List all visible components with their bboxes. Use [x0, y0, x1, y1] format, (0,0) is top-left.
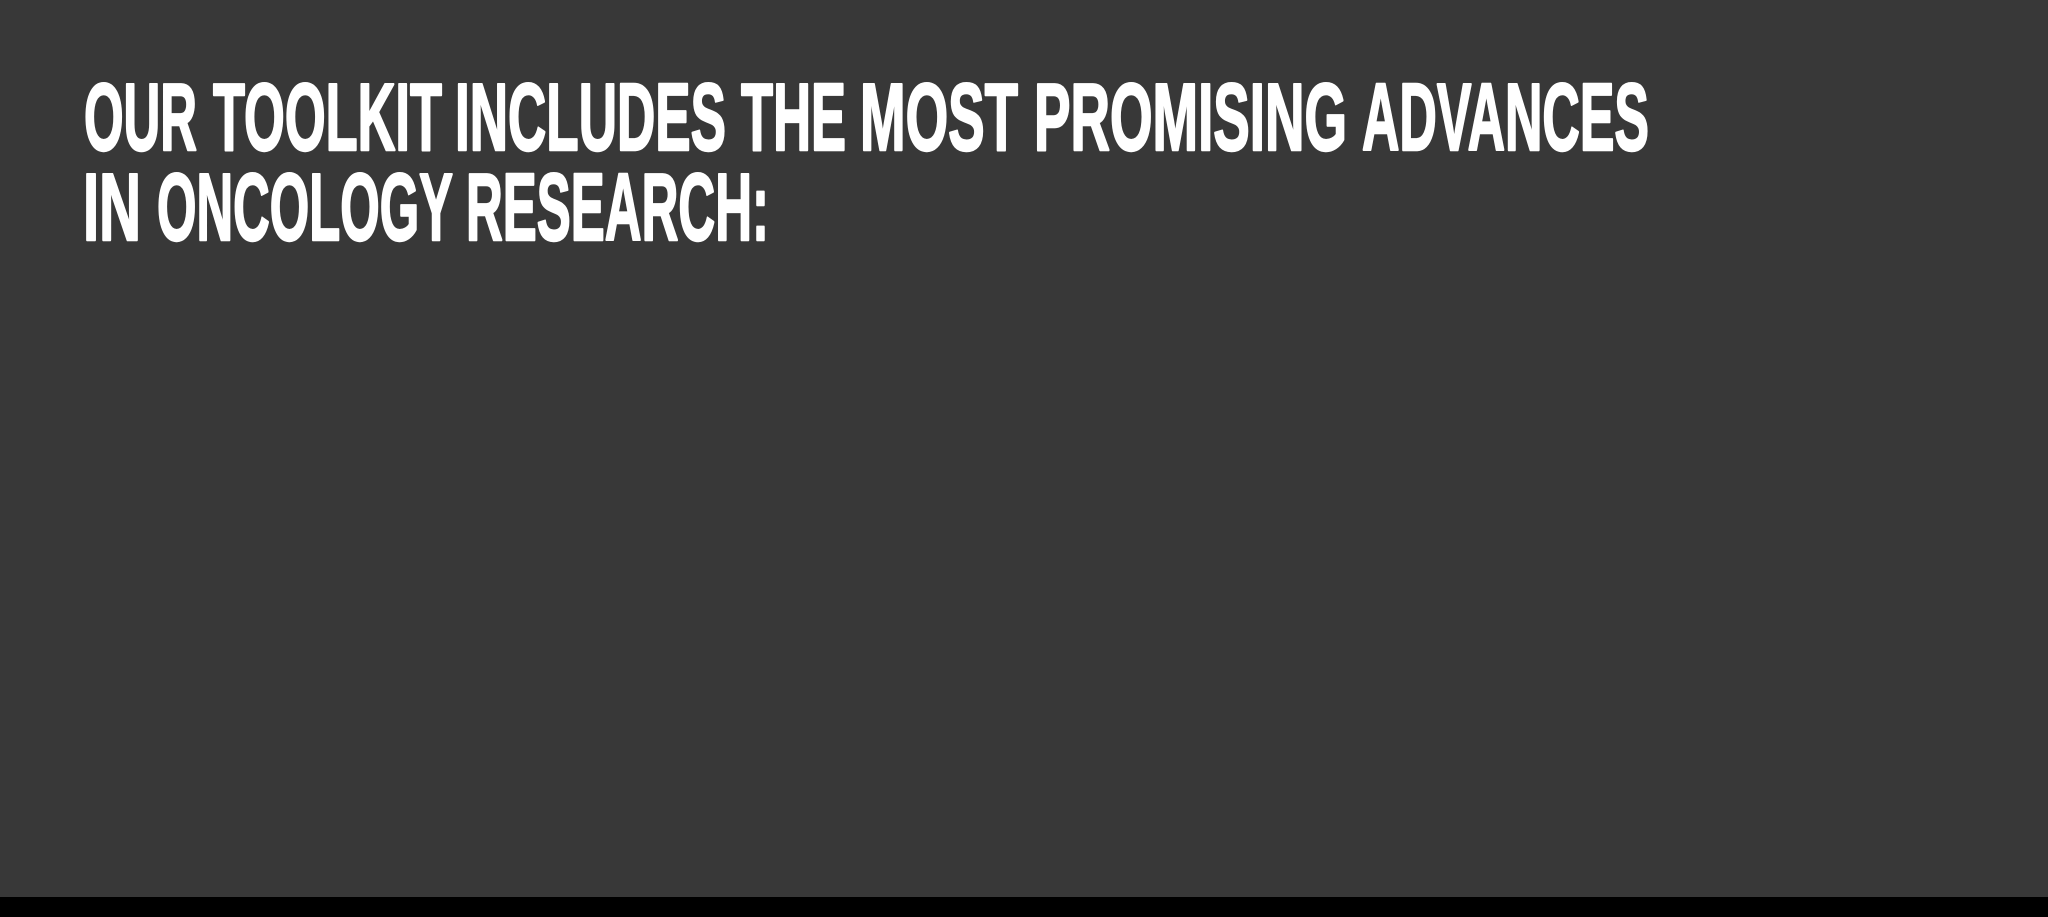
title: MOST [860, 64, 1018, 171]
title: THE [741, 64, 846, 171]
title [83, 64, 1649, 261]
bottom black bar [0, 897, 2048, 917]
title: PROMISING [1034, 64, 1347, 171]
title: RESEARCH: [466, 154, 769, 261]
title: TOOLKIT [213, 64, 442, 171]
title: OUR [84, 64, 197, 171]
title: IN [83, 154, 141, 261]
title: ADVANCES [1362, 64, 1649, 171]
title: ONCOLOGY [157, 154, 453, 261]
title: INCLUDES [455, 64, 726, 171]
